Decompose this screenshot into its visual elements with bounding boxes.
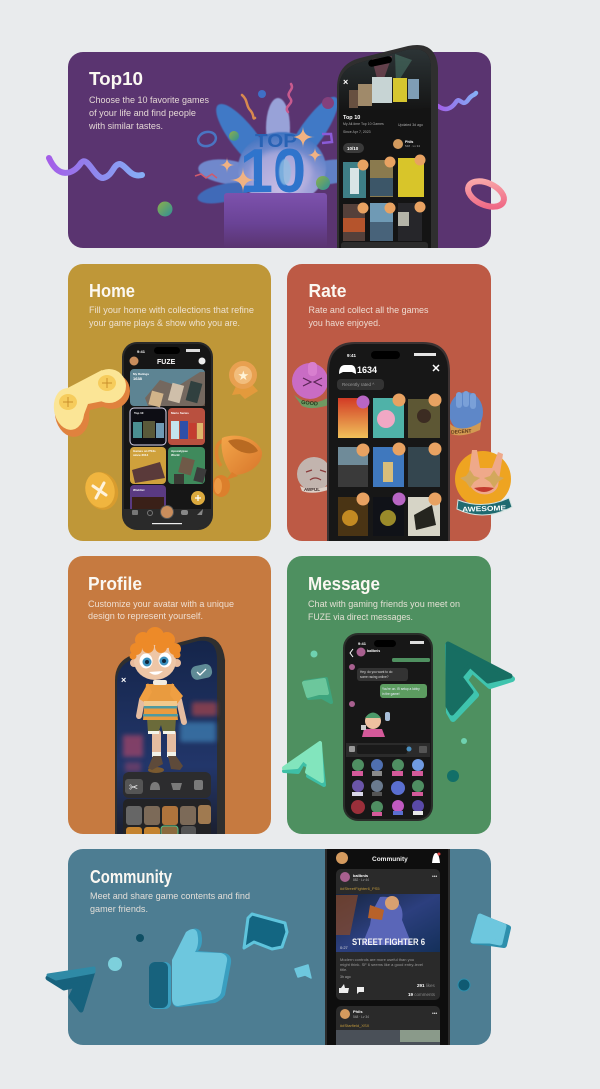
phone: Rate screen: Recently rated ^ [342, 382, 375, 387]
heading: Message: Message [308, 574, 380, 594]
chat bubble: received: Hey, do you want to do [360, 670, 393, 674]
illustration: top 10 trophy burst: 10 [240, 137, 306, 206]
sticker: awful: AWFUL [304, 487, 320, 492]
phone: Home screen [122, 342, 213, 530]
phone: chat screen [343, 633, 433, 821]
phone: Top10 screen: × [343, 77, 348, 87]
sticker: awesome [455, 450, 512, 515]
text: Home description [89, 305, 254, 329]
post: ballbnis: ballbnis [353, 873, 369, 878]
text: Home description: your game plays & show who you are. [89, 318, 240, 329]
post image: Street Fighter [336, 894, 440, 952]
chat bubble: received [357, 668, 408, 681]
post: ballbnis: 19 comments [408, 992, 436, 997]
tab bar [124, 506, 211, 528]
icon: left teal arrow [48, 968, 94, 1010]
post: Phils: Phils [353, 1009, 363, 1014]
phone: chat screen: 9:41 [358, 641, 367, 646]
post: ballbnis: Modern controls are more useful than you [340, 957, 414, 962]
phone: Top10 screen [337, 45, 438, 260]
phone: community feed: Community [372, 856, 408, 863]
text: Message description: FUZE via direct messages. [308, 612, 413, 623]
card: Top 10: Top 10 [134, 411, 144, 415]
card: Mario Series: Mario Series [171, 411, 189, 415]
text: Community description [90, 891, 250, 915]
icon: medal: ★ [238, 368, 249, 383]
text: Top10 description: Choose the 10 favorite games [89, 95, 209, 106]
button: add [191, 491, 205, 505]
icon: large teal arrow [448, 644, 512, 719]
icon: game controller [51, 369, 130, 440]
text: Profile description [88, 599, 234, 622]
phone: Top10 screen: 10/10 [347, 146, 359, 151]
panel: Top10 [49, 45, 508, 260]
text: Top10 description [88, 95, 209, 132]
phone: Top10 screen: My All-time Top 10 Games [343, 122, 384, 126]
post: Phils: 548 · Lv 34 [353, 1015, 369, 1019]
post: ballbnis: ##StreetFighter6_PS5 [340, 886, 380, 891]
panel: Profile [68, 556, 271, 850]
phone: Top10 screen: 548 · Lv 34 [405, 144, 420, 148]
icon: thumbs up [149, 928, 231, 1009]
post image: Street Fighter: 0:27 [340, 945, 349, 950]
icon: medal [229, 361, 258, 399]
card: My Ratings: My Ratings [133, 372, 149, 376]
decoration: green ball [158, 202, 172, 216]
chat bubble: sent: You're on. I'll setup a lobby [382, 687, 420, 691]
icon: right speech bubble [473, 916, 508, 945]
sticker: awful [297, 457, 331, 493]
phone: Top10 screen: Since Apr 7, 2023 [343, 130, 371, 134]
text: Rate description: you have enjoyed. [308, 318, 380, 329]
decoration: spheres [108, 934, 470, 991]
illustration: top 10 trophy burst [195, 84, 359, 248]
decoration: pink ring [464, 176, 508, 212]
phone: Top10 screen: Updated 3d ago [398, 123, 423, 127]
panel: Community [48, 840, 508, 1055]
icon: small speech bubble [295, 965, 311, 978]
text: Community description: gamer friends. [90, 904, 148, 915]
icon: dark speech bubble [244, 914, 287, 949]
phone: avatar editor [115, 637, 225, 850]
post: ballbnis: ••• [432, 874, 438, 880]
card: Apocalypse World: Apocalypse [171, 449, 188, 453]
sticker: chat character [361, 712, 390, 737]
post: ballbnis: 3h ago [340, 975, 351, 979]
card: Apocalypse World: World [171, 453, 180, 457]
phone: Rate screen [327, 342, 450, 560]
text: Home description: Fill your home with collections that refine [89, 305, 254, 316]
post: Phils [336, 1006, 440, 1045]
post: ballbnis: might think. SF 6 seems like a good entry-level [340, 962, 423, 967]
card: Games on PS4: Games on PS4s [133, 449, 156, 453]
text: Rate description [308, 305, 429, 329]
phone: Top10 screen: Phils [405, 140, 413, 144]
sticker grid [351, 759, 424, 816]
card: Top 10 [130, 408, 166, 445]
sticker: good: GOOD [301, 400, 318, 408]
card: Apocalypse World [168, 447, 207, 484]
sticker: good [292, 362, 332, 408]
phone: Rate screen: 1634 [357, 365, 377, 375]
text: Profile description: design to represent yourself. [88, 611, 203, 622]
phone: avatar editor: ✂ [129, 782, 138, 794]
chat bubble: sent: in the game! [382, 692, 400, 696]
phone: Home screen: 9:41 [137, 349, 146, 354]
heading: Home: Home [89, 281, 135, 301]
heading: Community: Community [90, 867, 172, 887]
phone: chat screen: ballbnis [367, 649, 380, 653]
heading: Profile: Profile [88, 574, 142, 594]
card: My Ratings [130, 369, 205, 407]
icon: mint arrow [284, 743, 324, 785]
decoration: green spheres [310, 650, 467, 782]
text: Message description [308, 599, 460, 623]
phone: Top10 screen: Top 10 [343, 115, 360, 121]
phone: Home screen: FUZE [157, 359, 176, 366]
sticker: decent [449, 391, 483, 436]
text: Message description: Chat with gaming friends you meet on [308, 599, 460, 610]
card: My Ratings: 1638 [133, 376, 143, 381]
sticker: awesome: AWESOME [462, 505, 507, 514]
sticker: decent: DECENT [451, 428, 472, 436]
post: Phils: ••• [432, 1011, 438, 1017]
heading: Top10: Top10 [89, 69, 143, 89]
heading: Rate: Rate [308, 281, 346, 301]
phone: avatar editor: × [121, 675, 126, 685]
panel: Message [284, 556, 512, 834]
post image: Street Fighter: STREET FIGHTER 6 [352, 937, 425, 948]
post: ballbnis [336, 869, 440, 1000]
icon: plus coin [81, 469, 122, 513]
card: Wishlist: Wishlist [133, 488, 144, 492]
post: ballbnis: title. [340, 967, 347, 972]
text: Rate description: Rate and collect all the games [308, 305, 429, 316]
post: Phils: ##Starfield_XSX [340, 1023, 370, 1028]
text: Profile description: Customize your avatar with a unique [88, 599, 234, 610]
illustration: top 10 trophy burst: TOP [255, 131, 297, 151]
text: Top10 description: of your life and find people [89, 108, 196, 119]
icon: green speech bubble [304, 679, 331, 702]
panel: Home [51, 264, 271, 541]
phone: Rate screen: 9:41 [347, 353, 357, 358]
card: Games on PS4 [130, 447, 166, 484]
post: ballbnis: 882 · Lv 44 [353, 878, 369, 882]
card: Mario Series [168, 408, 205, 445]
chat bubble: sent [380, 684, 427, 698]
decoration: purple squiggle right [438, 93, 476, 109]
card: Wishlist [130, 485, 166, 513]
decoration: purple squiggle left [49, 158, 142, 178]
post: ballbnis: 291 likes [417, 983, 436, 988]
icon: trophy [212, 436, 262, 497]
card: Games on PS4: since 2014 [133, 453, 149, 457]
chat bubble: received: some racing online? [360, 675, 389, 679]
illustration: avatar character [130, 627, 184, 773]
phone: community feed [325, 840, 450, 1055]
text: Top10 description: with similar tastes. [88, 121, 163, 132]
panel: Rate [287, 264, 512, 560]
text: Community description: Meet and share game contents and find [90, 891, 250, 902]
